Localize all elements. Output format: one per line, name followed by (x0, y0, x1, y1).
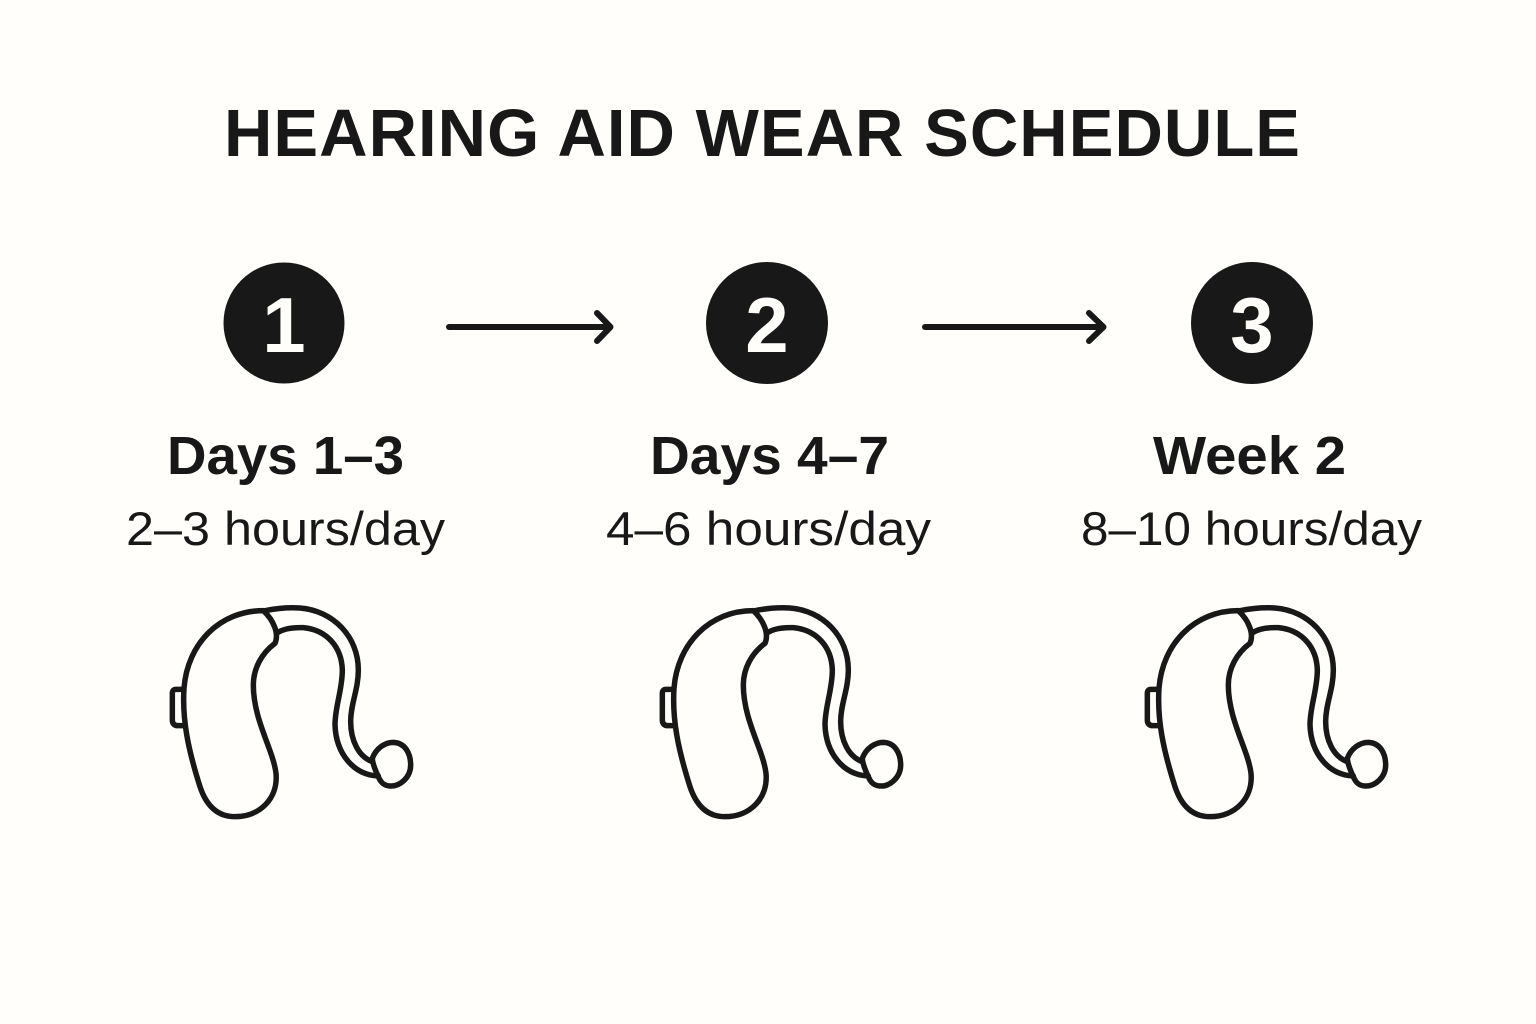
icon: hearing aid, step 1 (172, 608, 411, 817)
step 1 number badge: 1 (262, 281, 306, 369)
step 3 heading: Week 2 (1153, 426, 1346, 486)
arrow: step 2 to step 3 (925, 313, 1104, 341)
step 2 number badge (706, 262, 828, 384)
arrow: step 1 to step 2 (449, 313, 610, 341)
step 2 heading: Days 4–7 (650, 426, 889, 486)
step 1 heading: Days 1–3 (167, 426, 404, 486)
step 3 number badge: 3 (1230, 281, 1274, 369)
step 1 duration: 2–3 hours/day (126, 502, 446, 555)
title: HEARING AID WEAR SCHEDULE (224, 96, 1300, 171)
step 2 duration: 4–6 hours/day (606, 502, 932, 555)
step 3 number badge (1191, 262, 1313, 384)
step 1 number badge (224, 262, 344, 384)
step 2 number badge: 2 (745, 281, 789, 369)
icon: hearing aid, step 2 (662, 608, 901, 817)
step 3 duration: 8–10 hours/day (1081, 502, 1423, 555)
icon: hearing aid, step 3 (1147, 608, 1386, 817)
